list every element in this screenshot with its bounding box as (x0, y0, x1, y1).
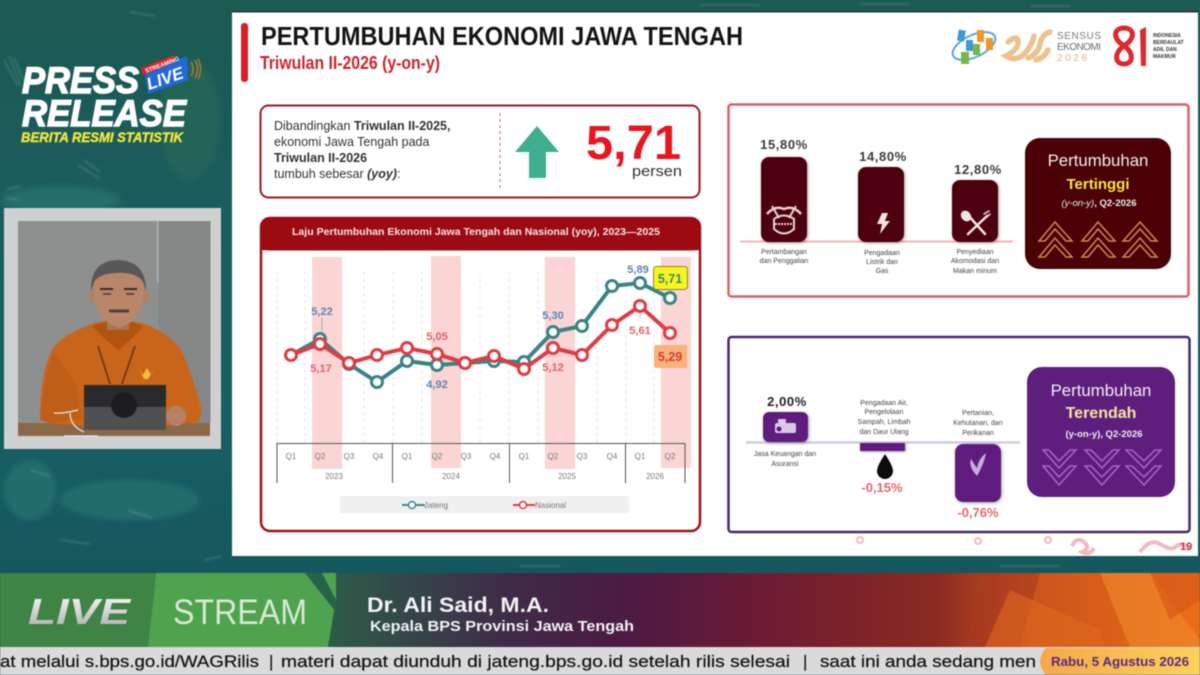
time axis: Q4 (373, 452, 384, 461)
bar: Jasa Keuangan: Asuransi (771, 461, 799, 468)
Q2 highlight bands (312, 256, 691, 469)
callout: headline growth: Dibandingkan Triwulan II-2025, (274, 119, 450, 133)
icon: coins (775, 419, 796, 433)
subtitle: Triwulan II-2026 (y-on-y) (260, 53, 440, 73)
logo: BPS (949, 26, 999, 66)
presenter (40, 260, 202, 426)
bar: Akomodasi: Akomodasi dan (951, 258, 999, 265)
series: Jateng (291, 278, 676, 388)
data labels (310, 264, 651, 391)
summary box: terendah: Pertumbuhan (1051, 381, 1151, 400)
live badge: STREAMING (145, 56, 181, 75)
date pill: Rabu, 5 Agustus 2026 (1051, 654, 1189, 669)
unit persen: persen (632, 163, 682, 180)
title: PERTUMBUHAN EKONOMI JAWA TENGAH (261, 21, 743, 51)
summary box: tertinggi (1025, 138, 1171, 269)
bar: Pengadaan Air: Pengadaan Air, (860, 400, 908, 407)
bar: Pengadaan Air: Pengelolaan (865, 409, 904, 416)
press release logo (21, 55, 200, 145)
news ticker: | (269, 652, 273, 671)
label: Jateng 5,71: 5,71 (658, 272, 682, 286)
summary box: tertinggi: (y-on-y), Q2-2026 (1062, 198, 1136, 209)
logo: Sensus Ekonomi: SENSUS (1057, 31, 1101, 42)
label: Jateng 5,71 (654, 266, 688, 290)
icon: down chevrons (1043, 450, 1161, 485)
bar: Listrik (858, 149, 907, 275)
news ticker: saat ini anda sedang men (820, 652, 1036, 671)
lower third band (0, 573, 1200, 647)
logo: Sensus Ekonomi (1006, 31, 1101, 64)
icon: leaf (970, 453, 986, 476)
bar: Pertambangan: 15,80% (760, 137, 808, 152)
data labels: 4,92 (426, 379, 448, 391)
bar: Pertanian (953, 410, 1003, 520)
press release logo: BERITA RESMI STATISTIK (21, 130, 184, 145)
logo: Sensus Ekonomi: EKONOMI (1057, 42, 1101, 53)
live stream badge: LIVE (28, 591, 131, 632)
bar: Akomodasi: Penyediaan (957, 249, 994, 256)
summary box: tertinggi: Pertumbuhan (1048, 151, 1148, 170)
bar: Listrik: 14,80% (859, 149, 907, 164)
bar: Pengadaan Air: dan Daur Ulang (859, 429, 909, 436)
legend: Nasional (535, 501, 566, 510)
bar: Pertambangan: dan Penggalian (760, 258, 808, 265)
series: Nasional (286, 300, 676, 374)
live badge (141, 55, 200, 94)
press release logo: PRESS (22, 60, 139, 101)
logo: 81: MAKMUR (1153, 54, 1176, 60)
panel: lowest growth (728, 337, 1190, 532)
panel: highest growth (728, 104, 1188, 296)
presenter video frame (4, 208, 221, 449)
data labels: 5,22 (311, 306, 333, 318)
data labels: 5,89 (627, 264, 649, 276)
summary box: terendah (1027, 367, 1175, 497)
bar: Pertambangan: Pertambangan (761, 249, 807, 256)
icon: mining (767, 206, 801, 234)
press release logo: RELEASE (22, 93, 187, 134)
label: Nasional 5,29 (654, 345, 687, 368)
live stream badge (0, 573, 336, 647)
slide footer ornaments (857, 537, 1190, 553)
bar: Pertanian: Kehutanan, dan (953, 420, 1003, 427)
bar: Akomodasi: 12,80% (954, 162, 1002, 177)
live badge: LIVE (144, 63, 187, 94)
live stream badge: STREAM (173, 593, 307, 632)
news ticker: materi dapat diunduh di jateng.bps.go.id setelah rilis selesai (281, 652, 790, 671)
time axis: Q3 (344, 452, 355, 461)
bar: Jasa Keuangan: Jasa Keuangan dan (754, 451, 816, 458)
data labels: 5,17 (310, 363, 332, 375)
bar: Akomodasi (951, 162, 1002, 275)
callout: headline growth (260, 106, 700, 198)
summary box: terendah: (y-on-y), Q2-2026 (1065, 429, 1143, 440)
panel: line chart (261, 218, 700, 531)
chart title: Laju Pertumbuhan Ekonomi Jawa Tengah dan Nasional (yoy), 2023—2025 (292, 226, 660, 238)
callout: headline growth: tumbuh sebesar (yoy): (274, 167, 400, 181)
icon: lightning (877, 213, 890, 234)
date pill (1040, 648, 1200, 675)
time axis: Q2 (432, 452, 443, 461)
slide accent bar (241, 23, 248, 82)
news ticker (0, 647, 1200, 675)
time axis: Q4 (607, 452, 618, 461)
time axis: 2026 (646, 472, 664, 481)
logo: 81: ADIL DAN (1153, 47, 1177, 53)
time axis: Q1 (402, 452, 413, 461)
tablet (54, 385, 186, 436)
time axis: Q4 (490, 452, 501, 461)
bar: Pertanian: Pertanian, (962, 410, 994, 417)
page number: 19 (1180, 541, 1192, 553)
logos (949, 26, 1184, 66)
summary box: terendah: Terendah (1066, 405, 1136, 422)
callout: headline growth: Triwulan II-2026 (274, 151, 367, 165)
value 5,71: 5,71 (586, 117, 681, 170)
bar: Jasa Keuangan (754, 394, 816, 468)
time axis: Q2 (315, 452, 326, 461)
time axis: 2023 (325, 472, 343, 481)
bar: Pertanian: -0,76% (957, 505, 999, 520)
summary box: tertinggi: Tertinggi (1066, 176, 1130, 193)
time axis: Q3 (461, 452, 472, 461)
speaker name: Dr. Ali Said, M.A. (367, 594, 549, 617)
callout: headline growth: ekonomi Jawa Tengah pada (274, 135, 429, 149)
time axis: Q3 (577, 452, 588, 461)
logo: 81: INDONESIA (1153, 33, 1181, 39)
legend: Jateng (424, 501, 448, 510)
icon: up arrow (515, 126, 559, 178)
table (18, 423, 210, 436)
time axis (277, 443, 685, 483)
bar: Pengadaan Air (858, 400, 911, 495)
time axis: 2025 (558, 472, 576, 481)
bar: Jasa Keuangan: 2,00% (767, 394, 807, 409)
time axis: Q2 (548, 452, 559, 461)
bar: Listrik: Pengadaan (864, 250, 900, 257)
data labels: 5,12 (542, 362, 564, 374)
time axis: Q1 (286, 452, 297, 461)
data labels: 5,61 (629, 325, 651, 337)
time axis: Q1 (519, 452, 530, 461)
label: Nasional 5,29: 5,29 (658, 350, 682, 364)
icon: oil drop (877, 454, 893, 479)
bar: Akomodasi: Makan minum (953, 268, 997, 275)
bar: Listrik: Listrik dan (866, 259, 898, 266)
time axis: Q1 (635, 452, 646, 461)
news ticker: at melalui s.bps.go.id/WAGRilis (0, 652, 259, 671)
data labels: 5,30 (542, 310, 564, 322)
time axis: Q2 (665, 452, 676, 461)
news ticker: | (803, 652, 807, 671)
time axis: 2024 (442, 472, 460, 481)
icon: cutlery (960, 210, 990, 234)
data labels: 5,05 (426, 331, 448, 343)
logo: 81 (1116, 27, 1184, 66)
slide (232, 11, 1198, 556)
logo: Sensus Ekonomi: 2026 (1057, 53, 1087, 64)
icon: up chevrons (1039, 222, 1157, 257)
bar: Pertambangan (760, 137, 808, 265)
logo: 81: BERDAULAT (1153, 40, 1184, 46)
bar: Listrik: Gas (876, 268, 889, 275)
speaker role: Kepala BPS Provinsi Jawa Tengah (370, 618, 634, 635)
bar: Pertanian: Perikanan (962, 430, 994, 437)
bar: Pengadaan Air: Sampah, Limbah (858, 419, 911, 426)
bar: Pengadaan Air: -0,15% (861, 480, 903, 495)
legend (340, 496, 629, 513)
